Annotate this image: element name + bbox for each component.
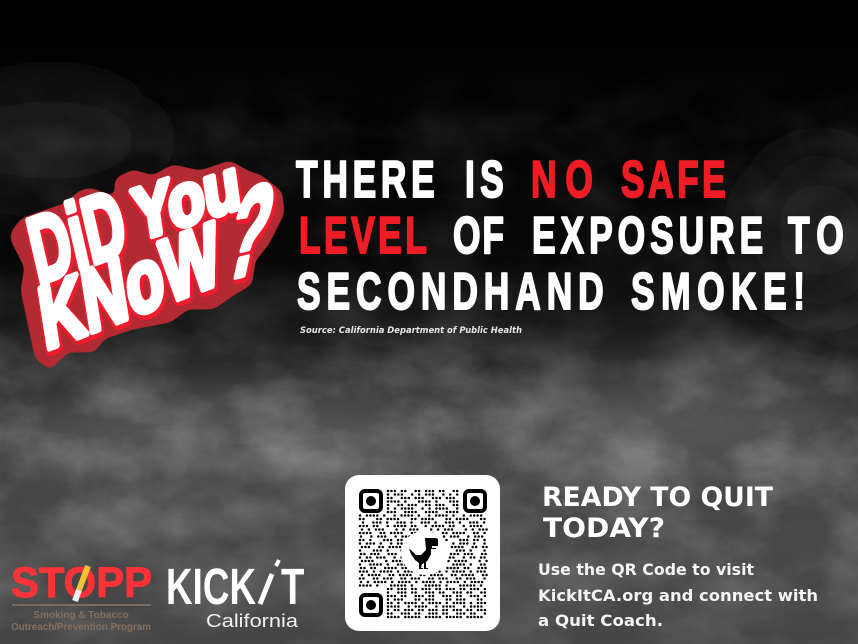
logo: Kick It California [166,558,305,631]
badge outline [13,163,282,367]
call to action text: a Quit Coach. [538,611,663,630]
call to action text: KickItCA.org and connect with [538,586,818,605]
logo: STOPP: Outreach/Prevention Program [11,622,151,633]
logo: STOPP [11,559,152,633]
badge lettering: KNoW [33,205,227,369]
headline: no safe level of exposure: THERE [296,151,435,209]
badge lettering: DiD [19,169,135,304]
logo: STOPP: STOPP [11,559,152,607]
QR data modules [360,491,487,617]
badge lettering: ? [216,154,285,307]
QR centre clear area [401,531,449,575]
headline: no safe level of exposure: OF [453,207,504,265]
headline: no safe level of exposure: LEVEL [299,207,427,265]
headline: no safe level of exposure: NO [531,151,593,209]
icon: dinosaur [409,538,438,569]
call to action heading: READY TO QUIT [542,482,774,513]
badge lettering [19,142,285,369]
headline: no safe level of exposure: SECONDHAND [297,263,604,321]
QR finder: top left [361,491,381,511]
logo: Kick It California: California [206,610,299,631]
logo: STOPP: Smoking & Tobacco [33,610,129,621]
headline: no safe level of exposure [296,151,844,321]
QR finder: top right [465,491,485,511]
call to action text: Use the QR Code to visit [538,560,754,579]
source note: Source: California Department of Public Health [300,326,522,336]
logo: Kick It California: T [281,558,305,615]
headline: no safe level of exposure: SAFE [621,151,726,209]
badge: Did You Know? [13,142,285,369]
logo: Kick It California: KICK [166,559,256,615]
headline: no safe level of exposure: EXPOSURE [532,207,763,265]
call to action heading: TODAY? [543,513,665,544]
call to action heading [542,482,774,544]
headline: no safe level of exposure: SMOKE! [631,263,805,321]
headline: no safe level of exposure: IS [465,151,504,209]
icon: cigarette slash [75,566,88,601]
badge lettering: You [128,142,245,257]
QR finder: bottom left [361,595,381,615]
QR code [345,475,500,631]
call to action text [538,560,818,630]
headline: no safe level of exposure: TO [788,207,844,265]
